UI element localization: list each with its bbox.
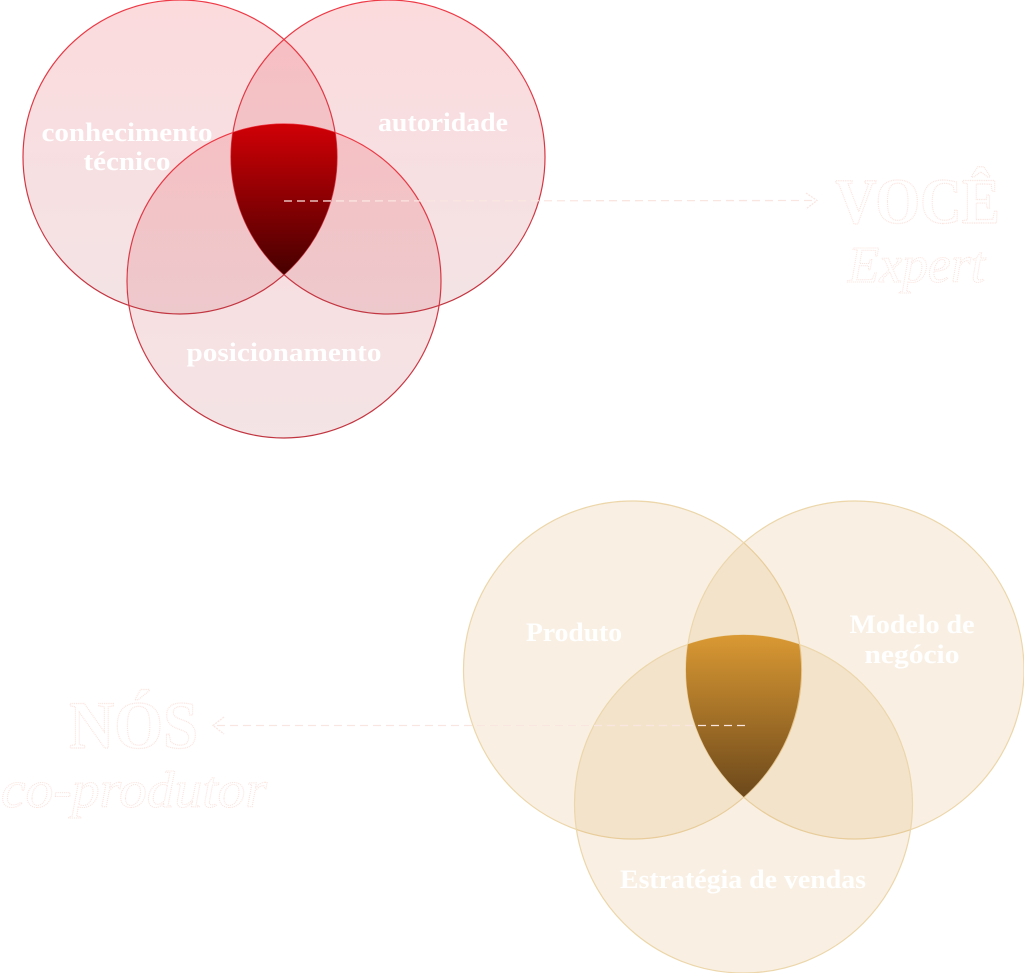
circle: estratégia de vendas [574,635,912,973]
circle: autoridade [231,0,545,314]
label: conhecimento técnico: técnico [84,147,170,176]
label: modelo de negócio: Modelo de [850,610,974,639]
arrow: você [284,193,817,209]
venn diagram: nós [464,501,1024,973]
heading: nós: NÓS [69,687,198,763]
circle: conhecimento técnico [23,0,337,314]
circle: posicionamento [127,124,441,438]
label: estratégia de vendas: Estratégia de vendas [620,865,866,894]
subheading: expert: Expert [847,237,987,294]
label: conhecimento técnico: conhecimento [42,118,212,147]
heading: você: VOCÊ [835,166,1000,238]
arrow: nós [213,717,745,734]
label: modelo de negócio: negócio [864,640,960,669]
subheading: co-produtor: co-produtor [1,762,268,819]
heading: nós co-produtor [1,687,268,819]
label: posicionamento: posicionamento [186,338,382,367]
label: autoridade: autoridade [378,108,508,137]
label: produto: Produto [526,618,622,647]
venn diagram: você [23,0,545,438]
heading: você expert [835,166,1000,294]
central intersection: gold [686,635,801,797]
circle: produto [464,501,802,839]
central intersection: red [231,124,337,275]
circle: modelo de negócio [686,501,1024,839]
